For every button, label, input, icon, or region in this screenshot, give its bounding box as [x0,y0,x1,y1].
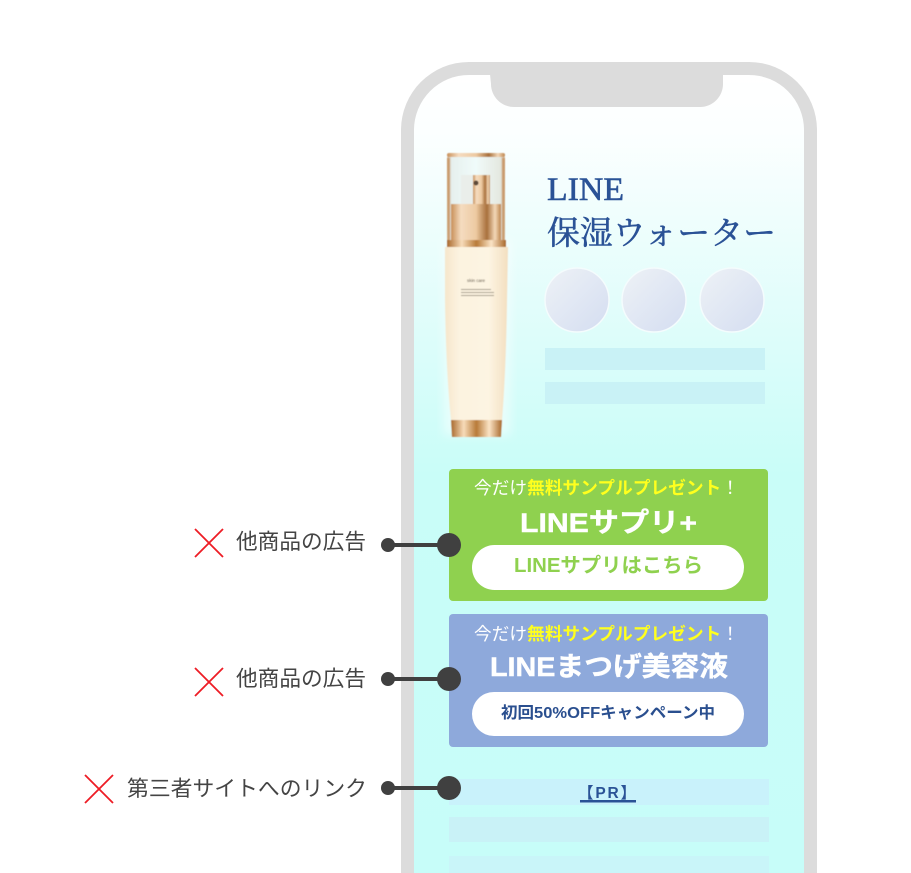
ad button: 初回50%OFFキャンペーン中 [501,704,715,722]
product title [547,172,776,252]
ad heading: LINEサプリ+ [520,508,697,538]
phone notch [490,74,723,107]
icon: red cross [85,775,113,803]
placeholder text bars [545,348,765,404]
bottle label text: skin care [467,278,485,283]
callout: other product ad 2 [195,666,461,696]
PR link: 【PR】 [578,785,636,802]
callout: third-party link [85,775,461,803]
third-party link area [449,779,769,873]
icon: red cross [195,529,223,557]
connector [381,667,461,691]
bottle label text [461,278,494,296]
phone screen [414,75,804,873]
product title: 保湿ウォーター [547,215,776,252]
callout label: 第三者サイトへのリンク [127,776,367,801]
icon: red cross [195,668,223,696]
callout: other product ad 1 [195,529,461,557]
feature circles [545,268,764,332]
callout label: 他商品の広告 [236,666,366,691]
ad button: LINEサプリはこちら [514,554,703,577]
ad banner: LINE supplement [449,469,768,601]
ad button [472,545,744,590]
ad tagline: 今だけ無料サンプルプレゼント！ [474,624,739,644]
product title: LINE [547,172,624,208]
product bottle [444,153,510,437]
ad tagline: 今だけ無料サンプルプレゼント！ [474,478,739,498]
callout label: 他商品の広告 [236,529,366,554]
ad button [472,692,744,736]
connector [381,776,461,800]
connector [381,533,461,557]
phone frame [401,62,817,873]
ad banner: LINE eyelash serum [449,614,768,747]
ad heading: LINEまつげ美容液 [490,652,728,682]
